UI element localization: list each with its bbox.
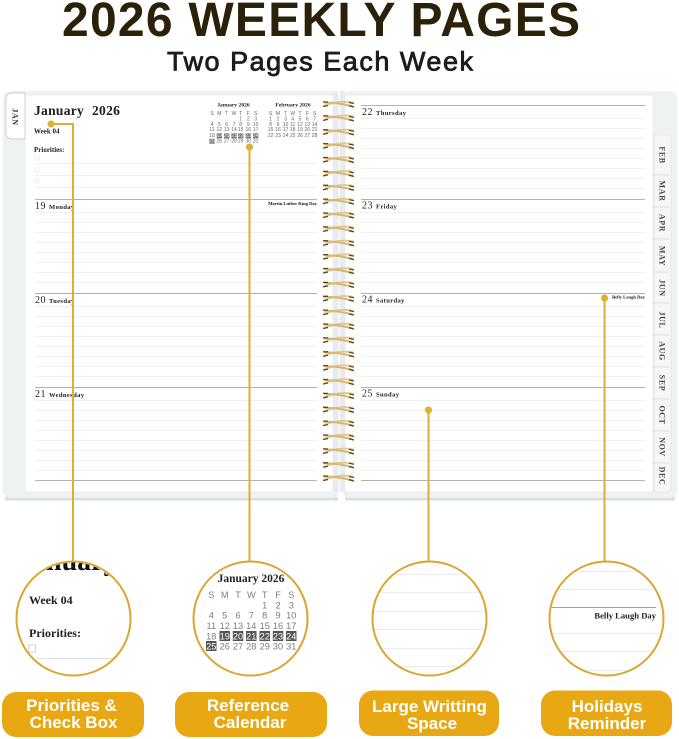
day headers: Tuesday	[49, 298, 75, 305]
day headers: 22	[362, 107, 373, 118]
holiday: Belly Laugh Day: Belly Laugh Day	[612, 294, 646, 300]
leader lines	[51, 124, 604, 561]
day headers	[35, 107, 407, 400]
mini calendar: January: 21	[231, 133, 237, 139]
mini calendar: February: 12	[297, 122, 303, 128]
detail circle: reference calendar: 15	[260, 621, 270, 631]
mini calendar: February: 5	[299, 116, 302, 122]
detail circle: reference calendar: 28	[246, 642, 256, 652]
planner notebook	[3, 91, 677, 500]
day headers: 21	[35, 389, 46, 400]
mini calendar: February: 17	[283, 127, 289, 133]
mini calendar: January: T	[239, 111, 242, 117]
detail circle: reference calendar: 31	[286, 642, 296, 652]
mini calendar: February: 25	[290, 133, 296, 139]
month tabs: APR	[658, 214, 666, 232]
button: reference calendar: Reference	[207, 696, 289, 715]
button: reference calendar: Calendar	[214, 713, 287, 732]
month tabs: AUG	[658, 341, 666, 361]
priorities label: Priorities:	[34, 146, 64, 154]
detail circle: reference calendar: M	[221, 590, 229, 600]
detail circle: reference calendar: 3	[289, 600, 294, 610]
detail circle: reference calendar: F	[275, 590, 281, 600]
detail circle: reference calendar: T	[235, 590, 241, 600]
detail circle: reference calendar: 5	[222, 610, 227, 620]
button: large writing space: Space	[407, 714, 457, 733]
mini calendar: February: 22	[268, 133, 274, 139]
button: holidays reminder: Reminder	[568, 714, 647, 733]
detail circle: reference calendar: 24	[286, 632, 296, 642]
JAN tab	[6, 93, 25, 139]
detail circle: reference calendar: 27	[233, 642, 243, 652]
mini calendar: February: T	[284, 111, 287, 117]
leader dots	[48, 120, 608, 414]
month tabs: MAY	[658, 246, 666, 266]
detail circle: reference calendar: 6	[235, 610, 241, 620]
detail circle: priorities	[16, 546, 130, 676]
mini calendar: February: 27	[305, 133, 310, 139]
mini calendar: February: 28	[312, 133, 318, 139]
detail circle: reference calendar: 22	[260, 632, 270, 642]
detail circle: reference calendar	[194, 562, 308, 676]
mini calendar: January: 4	[211, 122, 214, 128]
detail circle: reference calendar: 1	[262, 600, 267, 610]
mini calendar: February: February 2026	[275, 102, 311, 108]
mini calendar: February: 13	[305, 122, 310, 128]
cover shadow	[5, 497, 675, 500]
mini calendar: January: 31	[253, 139, 259, 145]
week label: Week 04	[34, 128, 60, 136]
month tabs: JUL	[658, 312, 666, 328]
mini calendar: February: T	[298, 111, 302, 117]
detail circle: priorities: January	[18, 546, 118, 577]
day headers: 20	[35, 295, 46, 306]
mini calendar: January: 17	[253, 127, 259, 133]
detail circle: reference calendar: 18	[206, 632, 216, 642]
mini calendar: February: F	[306, 111, 309, 117]
detail circle: holidays: Belly Laugh Day	[594, 610, 657, 620]
detail circle: reference calendar: 7	[249, 610, 254, 620]
mini calendar: January: 29	[238, 139, 244, 145]
button: priorities and check box: Check Box	[30, 713, 118, 732]
detail circle: reference calendar: 10	[286, 610, 296, 620]
mini calendar: February: 8	[269, 122, 272, 128]
mini calendar: January: F	[247, 111, 250, 117]
mini calendar: February: 6	[306, 116, 309, 122]
check boxes	[35, 156, 39, 183]
detail circle: reference calendar: 9	[275, 610, 281, 620]
button: priorities and check box	[2, 692, 144, 737]
mini calendar: January: 25	[209, 139, 215, 145]
mini calendar: February: S	[269, 111, 273, 117]
mini calendar: February: 7	[313, 116, 316, 122]
detail circle: reference calendar: T	[262, 590, 268, 600]
mini calendar: January	[209, 102, 259, 145]
mini calendar: January: 3	[254, 116, 257, 122]
button: reference calendar	[175, 692, 327, 737]
mini calendar: January: 23	[246, 133, 251, 139]
detail circle: reference calendar: W	[247, 590, 256, 600]
mini calendar: January: 7	[233, 122, 236, 128]
mini calendar: January: 24	[253, 133, 259, 139]
mini calendar: January: 13	[224, 127, 230, 133]
month tabs: JUN	[658, 279, 666, 297]
detail circle: reference calendar: 20	[233, 632, 243, 642]
detail circle: reference calendar: 4	[209, 610, 214, 620]
detail circle: reference calendar: 26	[220, 642, 230, 652]
day headers: Friday	[376, 204, 398, 210]
mini calendar: January: 2	[247, 116, 250, 122]
month tabs	[654, 135, 671, 492]
mini calendar: February: 23	[275, 133, 281, 139]
detail circle: reference calendar: 29	[260, 642, 270, 652]
mini calendar: January: 19	[217, 133, 222, 139]
mini calendar: February: 19	[297, 127, 303, 133]
ruled lines	[35, 106, 645, 480]
right cover	[343, 91, 677, 498]
mini calendar: February: 16	[275, 127, 281, 133]
mini calendar: January: 16	[246, 127, 251, 133]
mini calendar: January: 26	[217, 139, 222, 145]
mini calendar: January: 30	[246, 139, 251, 145]
month tabs: DEC	[658, 467, 666, 485]
day headers: 19	[35, 201, 46, 212]
button: priorities and check box: Priorities &	[26, 696, 117, 715]
button: large writing space	[359, 690, 499, 736]
mini calendar: February	[268, 102, 318, 139]
detail circle: priorities: Priorities:	[29, 626, 81, 640]
mini calendar: February: S	[313, 111, 317, 117]
detail circle: holidays	[549, 562, 664, 676]
day headers: Saturday	[376, 298, 405, 304]
gutter	[333, 91, 345, 492]
mini calendar: January: 12	[217, 127, 222, 133]
button: holidays reminder: Holidays	[572, 697, 642, 716]
detail circle: reference calendar: 17	[286, 621, 296, 631]
mini calendar: January: 9	[247, 122, 250, 128]
mini calendar: February: W	[290, 111, 295, 117]
detail circle: reference calendar: 13	[233, 621, 243, 631]
mini calendar: February: 26	[297, 133, 303, 139]
mini calendar: February: 15	[268, 127, 274, 133]
detail circle: reference calendar: 8	[262, 610, 267, 620]
detail circle: reference calendar: 14	[246, 621, 256, 631]
mini calendar: January: 10	[253, 122, 259, 128]
day headers: Wednesday	[49, 392, 85, 399]
day headers: Thursday	[376, 110, 407, 117]
day headers: Monday	[49, 204, 75, 211]
mini calendar: February: 3	[284, 116, 287, 122]
month tabs: SEP	[658, 375, 666, 391]
mini calendar: February: 9	[277, 122, 280, 128]
holiday: Martin Luther King Day: Martin Luther King Day	[268, 201, 318, 206]
mini calendar: January: T	[225, 111, 228, 117]
day headers: 23	[362, 200, 373, 212]
mini calendar: February: 1	[269, 116, 272, 122]
detail circle: reference calendar: 16	[273, 621, 283, 631]
left cover	[3, 91, 339, 498]
detail circle: reference calendar: 19	[220, 632, 230, 642]
mini calendar: January: M	[217, 111, 221, 117]
detail circle: reference calendar: S	[208, 590, 214, 600]
month tabs: NOV	[658, 437, 666, 457]
mini calendar: January: 14	[231, 127, 237, 133]
mini calendar: February: 18	[290, 127, 296, 133]
day headers: 25	[362, 388, 373, 400]
mini calendar: January: S	[254, 111, 258, 117]
detail circle: reference calendar: S	[288, 590, 294, 600]
detail circle: reference calendar: 30	[273, 642, 283, 652]
mini calendar: January: 28	[231, 139, 237, 145]
detail circle: reference calendar: January 2026	[218, 573, 285, 585]
JAN tab: JAN	[10, 108, 20, 126]
mini calendar: January: 1	[239, 116, 242, 122]
detail circle: priorities: Week 04	[29, 593, 73, 607]
detail circle: writing space	[372, 562, 487, 676]
mini calendar: January: W	[232, 111, 237, 117]
mini calendar: February: 20	[305, 127, 310, 133]
page heading: January	[34, 103, 84, 118]
mini calendar: January: January 2026	[217, 102, 250, 108]
mini calendar: January: 15	[238, 127, 244, 133]
mini calendar: February: M	[276, 111, 280, 117]
detail circle: reference calendar: 25	[206, 642, 216, 652]
detail circle: reference calendar: 23	[273, 632, 283, 642]
mini calendar: January: 27	[224, 139, 230, 145]
spiral binding	[323, 102, 354, 481]
mini calendar: February: 2	[277, 116, 280, 122]
mini calendar: February: 24	[283, 133, 289, 139]
day headers: 24	[362, 294, 373, 306]
mini calendar: January: 5	[218, 122, 221, 128]
mini calendar: January: 18	[209, 133, 215, 139]
button: large writing space: Large Writting	[372, 697, 487, 716]
mini calendar: January: 8	[239, 122, 242, 128]
detail circle: reference calendar: 11	[207, 621, 216, 631]
page heading: 2026	[92, 103, 120, 118]
subtitle: Two Pages Each Week	[167, 46, 474, 76]
mini calendar: January: 22	[238, 133, 244, 139]
mini calendar: February: 21	[312, 127, 318, 133]
month tabs: MAR	[658, 181, 666, 201]
button: holidays reminder	[541, 690, 672, 736]
month tabs: FEB	[658, 146, 666, 164]
detail circle: reference calendar: 2	[275, 600, 281, 610]
right page	[345, 95, 653, 492]
detail circle: reference calendar: 21	[246, 632, 256, 642]
mini calendar: February: 11	[290, 122, 296, 128]
mini calendar: January: 20	[224, 133, 230, 139]
mini calendar: February: 14	[312, 122, 318, 128]
month tabs: OCT	[658, 405, 666, 425]
mini calendar: January: 6	[225, 122, 228, 128]
detail circle: reference calendar: 12	[220, 621, 230, 631]
mini calendar: January: 11	[209, 127, 215, 133]
mini calendar: February: 4	[291, 116, 294, 122]
mini calendar: January: S	[210, 111, 214, 117]
day headers: Sunday	[376, 392, 400, 398]
left page	[25, 95, 333, 492]
mini calendar: February: 10	[283, 122, 289, 128]
